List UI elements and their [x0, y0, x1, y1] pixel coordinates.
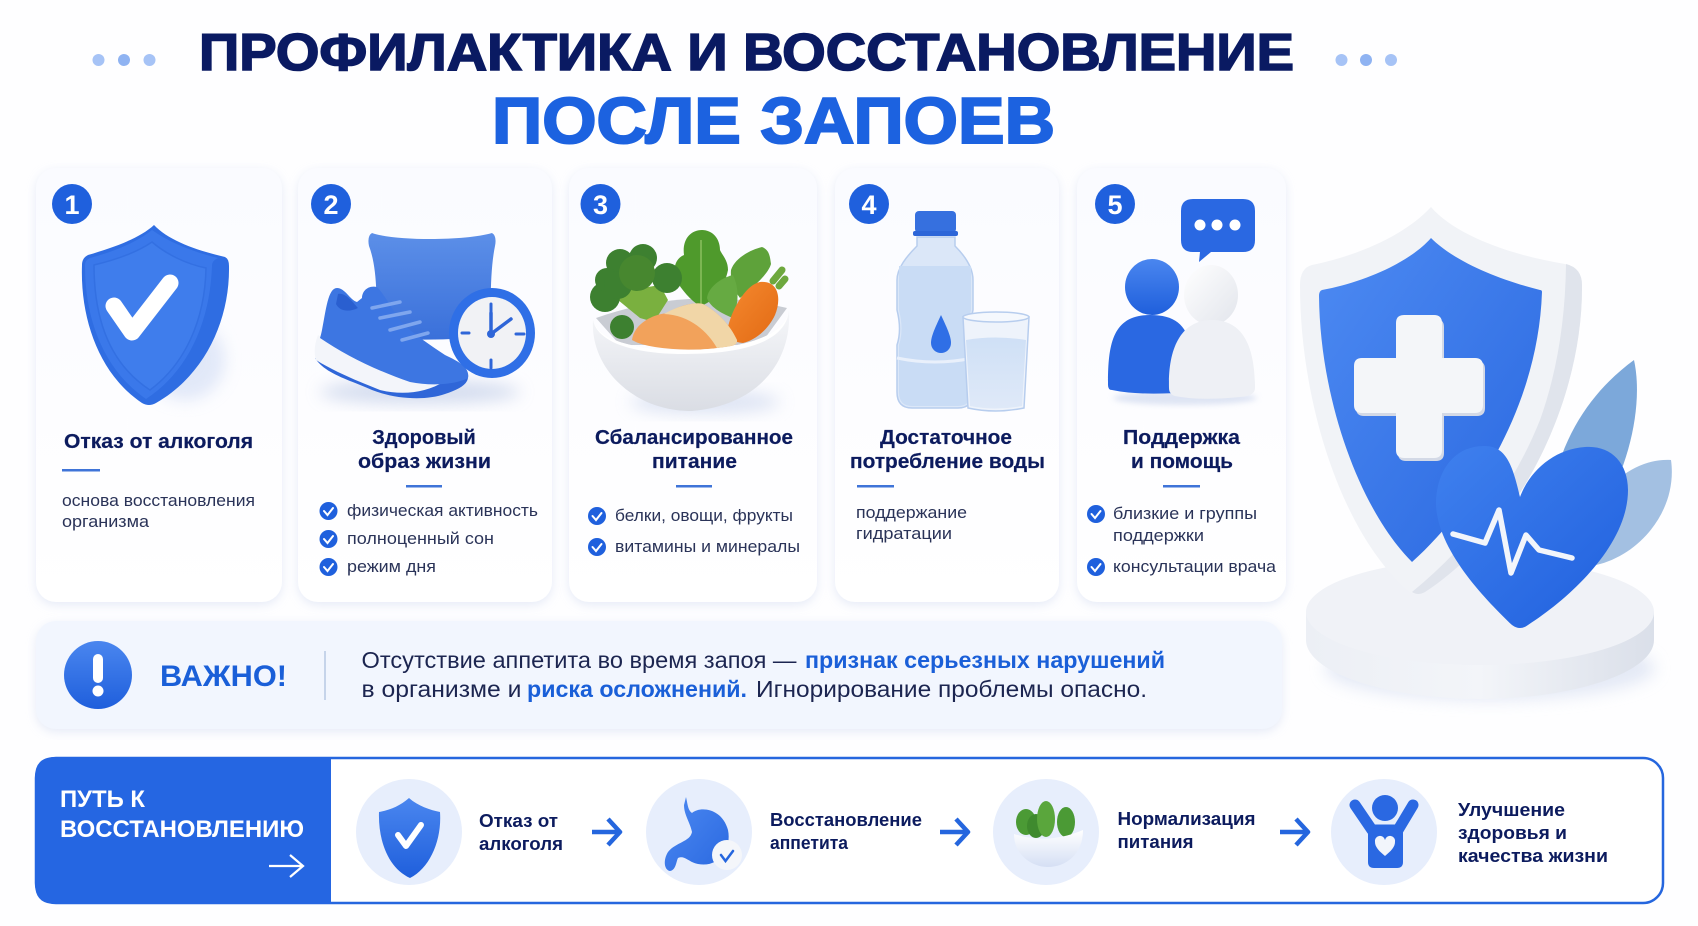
card 1 heading: Отказ от алкоголя — [64, 431, 253, 453]
card 3 checklist: белки, овощи, фрукты — [615, 507, 793, 525]
arrow 2 — [940, 819, 968, 845]
cross — [1356, 319, 1485, 461]
card 5 checklist: поддержки — [1113, 527, 1204, 545]
card 2 checklist: полноценный сон — [347, 530, 494, 548]
step 1 — [356, 779, 563, 885]
step 3 — [993, 779, 1256, 885]
bowl — [593, 310, 789, 411]
title — [92, 24, 1397, 157]
card 1 text: организма — [62, 513, 150, 531]
clock — [449, 288, 535, 378]
card 4 text: гидратации — [856, 525, 952, 543]
card 3 heading — [595, 427, 793, 473]
icon: shield with check — [82, 225, 229, 405]
arrow 3 — [1280, 819, 1308, 845]
card 4 text — [856, 504, 967, 543]
arrow 1 — [592, 819, 620, 845]
title line 1: ПРОФИЛАКТИКА И ВОССТАНОВЛЕНИЕ — [199, 24, 1294, 82]
card 3 checklist — [588, 507, 800, 556]
card 5 heading: Поддержка — [1123, 427, 1241, 449]
glass — [963, 317, 1029, 411]
icon: pillow, sneaker and clock — [315, 233, 535, 404]
heart — [1436, 446, 1628, 628]
icon: two people — [1108, 259, 1257, 405]
step 3: питания — [1118, 831, 1194, 852]
number badge 3: 3 — [593, 190, 608, 220]
path heading block: ПУТЬ К — [60, 786, 145, 813]
alert text — [362, 647, 1165, 702]
panel: card 1 refusal of alcohol — [36, 168, 282, 602]
card 2 heading: Здоровый — [372, 427, 476, 449]
large shield — [1300, 207, 1582, 595]
icon: bowl with vegetables — [590, 230, 789, 414]
panel: path to recovery — [35, 757, 1663, 904]
carrot — [727, 282, 778, 343]
step 2: аппетита — [770, 832, 849, 853]
number badge 2: 2 — [323, 190, 339, 220]
card 2 checklist: режим дня — [347, 558, 436, 576]
card 3 heading: питание — [652, 451, 737, 473]
card 4 heading: потребление воды — [850, 451, 1045, 473]
salmon — [632, 303, 737, 350]
bottle — [897, 237, 973, 408]
card 1 text: основа восстановления — [62, 492, 255, 510]
card 3 heading: Сбалансированное — [595, 427, 793, 449]
card 4 text: поддержание — [856, 504, 967, 522]
card 2 checklist: физическая активность — [347, 502, 538, 520]
card 5 checklist — [1087, 505, 1277, 576]
spinach leaves — [674, 230, 728, 306]
icon: speech bubble — [1181, 199, 1255, 262]
step 3: Нормализация — [1118, 808, 1256, 829]
illustration: shield, heart and pedestal — [1300, 207, 1672, 700]
alert text: риска осложнений. — [527, 676, 747, 702]
step 4 — [1331, 779, 1608, 885]
step 1: алкоголя — [479, 833, 563, 854]
step 4: здоровья и — [1458, 822, 1567, 843]
number badge 4: 4 — [861, 190, 877, 220]
sneaker upper — [320, 287, 468, 384]
alert text: в организме и — [362, 676, 522, 702]
step 2 — [646, 779, 922, 885]
card 5 checklist: близкие и группы — [1113, 505, 1257, 523]
card 2 heading: образ жизни — [358, 451, 491, 473]
path heading block: ВОССТАНОВЛЕНИЮ — [60, 816, 304, 843]
card 4 heading — [850, 427, 1045, 473]
card 2 heading — [358, 427, 491, 473]
pillow — [368, 233, 496, 340]
card 2 checklist — [320, 502, 538, 576]
card 5 checklist: консультации врача — [1113, 558, 1277, 576]
panel: card 4 water — [835, 168, 1059, 602]
alert text: Отсутствие аппетита во время запоя — — [362, 647, 797, 673]
number badge 2 — [311, 184, 351, 224]
icon: stomach — [665, 797, 729, 871]
pedestal — [1306, 559, 1655, 700]
panel: card 5 support — [1077, 168, 1286, 602]
card 5 heading: и помощь — [1131, 451, 1233, 473]
card 5 heading — [1123, 427, 1241, 473]
left decorative dots — [92, 54, 156, 66]
icon: exclamation mark — [64, 641, 132, 709]
icon: small bowl of greens — [1014, 801, 1083, 867]
path heading block — [35, 757, 331, 904]
icon: water bottle and glass — [897, 211, 1029, 411]
step 4: качества жизни — [1458, 845, 1608, 866]
broccoli — [618, 285, 668, 322]
number badge 1: 1 — [64, 190, 80, 220]
panel: card 3 balanced diet — [569, 168, 817, 602]
icon: happy person with heart — [1372, 795, 1398, 821]
important label: ВАЖНО! — [160, 660, 287, 693]
card 3 checklist: витамины и минералы — [615, 538, 800, 556]
number badge 3 — [580, 184, 620, 224]
step 1: Отказ от — [479, 810, 558, 831]
card 4 heading: Достаточное — [880, 427, 1012, 449]
alert text: Игнорирование проблемы опасно. — [756, 676, 1147, 702]
step 2: Восстановление — [770, 809, 922, 830]
right decorative dots — [1336, 54, 1397, 66]
title line 2: ПОСЛЕ ЗАПОЕВ — [492, 84, 1055, 157]
leaves — [1552, 360, 1672, 565]
alert text: признак серьезных нарушений — [805, 647, 1165, 673]
sneaker sole — [315, 358, 468, 398]
bowl interior — [596, 299, 787, 345]
number badge 1 — [52, 184, 92, 224]
card 1 text — [62, 492, 255, 531]
panel: important alert — [36, 621, 1282, 729]
number badge 4 — [849, 184, 889, 224]
number badge 5 — [1095, 184, 1135, 224]
step 4: Улучшение — [1458, 799, 1565, 820]
panel: card 2 healthy lifestyle — [298, 168, 552, 602]
number badge 5: 5 — [1107, 190, 1123, 220]
